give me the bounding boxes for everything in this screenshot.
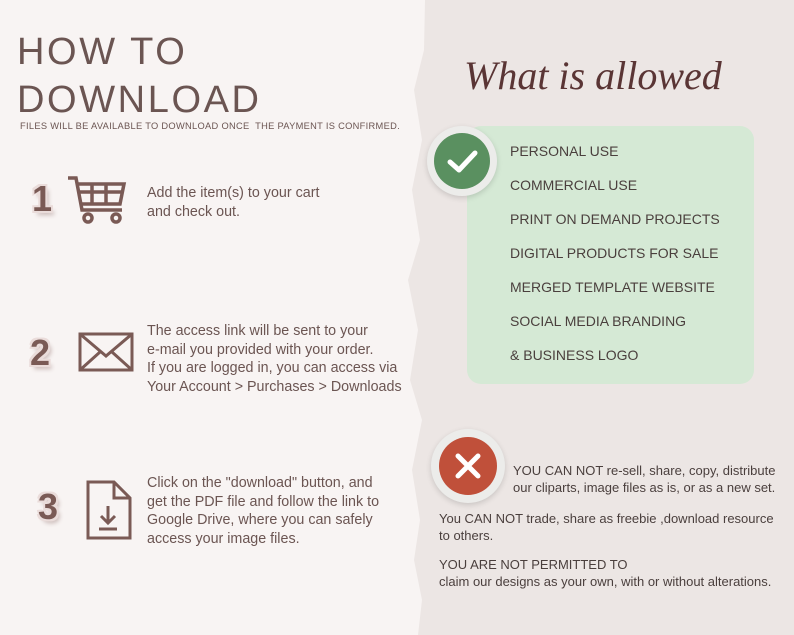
- icon: cross: [431, 429, 505, 503]
- allowed items: MERGED TEMPLATE WEBSITE: [510, 279, 715, 295]
- text: Your Account > Purchases > Downloads: [147, 378, 402, 394]
- allowed items: PRINT ON DEMAND PROJECTS: [510, 211, 720, 227]
- text: Google Drive, where you can safely: [147, 512, 373, 528]
- text: e-mail you provided with your order.: [147, 342, 373, 358]
- title: [17, 31, 262, 121]
- step 2: [29, 323, 402, 394]
- icon: cart: [68, 176, 126, 224]
- text: If you are logged in, you can access via: [147, 360, 397, 376]
- allowed items: COMMERCIAL USE: [510, 177, 637, 193]
- text: Click on the "download" button, and: [147, 475, 373, 491]
- text: [147, 185, 320, 220]
- text: Add the item(s) to your cart: [147, 185, 319, 201]
- not allowed text: YOU CAN NOT re-sell, share, copy, distribute: [513, 463, 776, 478]
- right background panel: [408, 0, 794, 635]
- text: [147, 475, 379, 546]
- not allowed text: [513, 463, 776, 495]
- icon: file download: [86, 480, 132, 540]
- title: HOW TO: [17, 31, 187, 73]
- text: [147, 323, 402, 394]
- allowed items: SOCIAL MEDIA BRANDING: [510, 313, 686, 329]
- allowed items: PERSONAL USE: [510, 143, 618, 159]
- not allowed text: our cliparts, image files as is, or as a new set.: [513, 480, 775, 495]
- step 1: [32, 176, 320, 224]
- step 3: [37, 475, 379, 546]
- number 2: 2: [30, 332, 50, 373]
- text: You CAN NOT trade, share as freebie ,download resource: [439, 511, 774, 526]
- allowed items: & BUSINESS LOGO: [510, 347, 638, 363]
- text: and check out.: [147, 204, 240, 220]
- number 3: 3: [38, 486, 58, 527]
- panel: allowed list: [467, 126, 754, 384]
- number 1: 1: [32, 178, 52, 219]
- icon: check: [427, 126, 497, 196]
- text: to others.: [439, 528, 493, 543]
- heading: what is allowed: What is allowed: [464, 53, 722, 98]
- text: YOU ARE NOT PERMITTED TO: [439, 557, 628, 572]
- text: get the PDF file and follow the link to: [147, 494, 379, 510]
- text: claim our designs as your own, with or without alterations.: [439, 574, 771, 589]
- subtitle: FILES WILL BE AVAILABLE TO DOWNLOAD ONCE THE PAYMENT IS CONFIRMED.: [20, 121, 400, 131]
- text: access your image files.: [147, 530, 300, 546]
- icon: envelope: [78, 332, 134, 372]
- allowed items: [510, 143, 720, 363]
- allowed items: DIGITAL PRODUCTS FOR SALE: [510, 245, 718, 261]
- title: DOWNLOAD: [17, 79, 262, 121]
- text: The access link will be sent to your: [147, 323, 368, 339]
